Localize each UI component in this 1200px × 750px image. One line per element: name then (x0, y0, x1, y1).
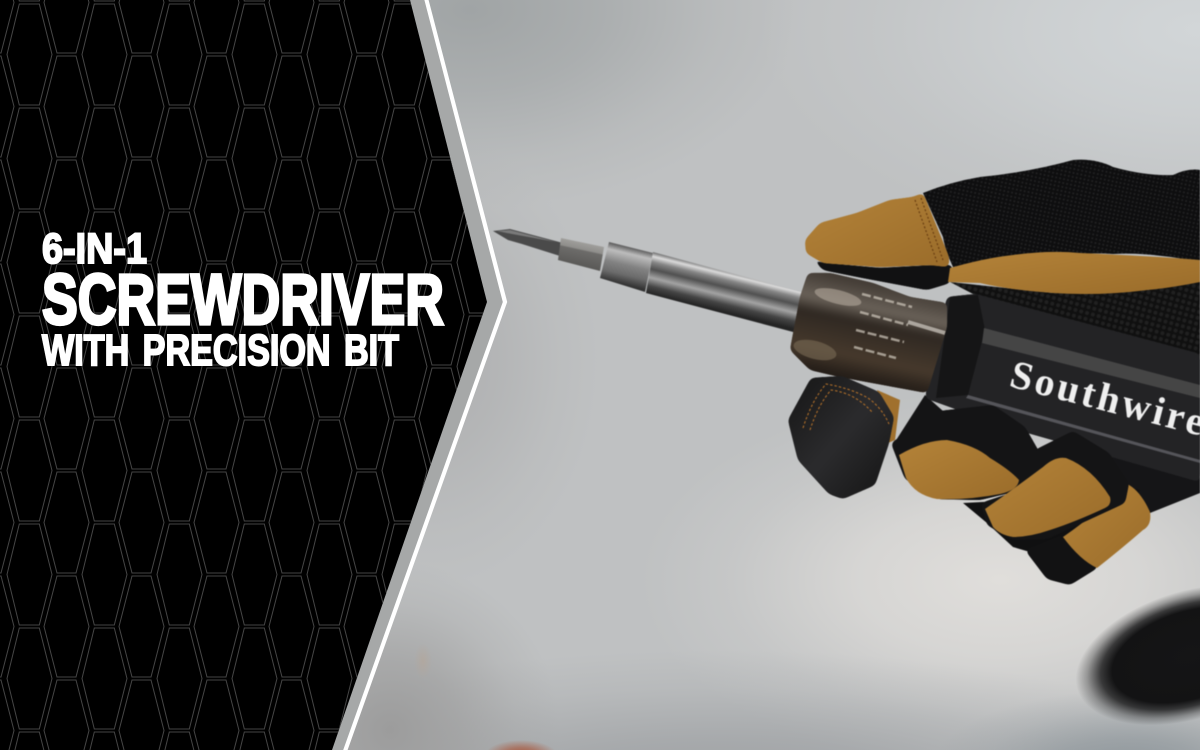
glove index fingertip (805, 193, 949, 267)
handle lower groove (966, 395, 1200, 463)
screwdriver metal collar (600, 242, 653, 292)
glove ring finger (981, 431, 1129, 540)
black sliver above fingertip (857, 203, 898, 217)
glove dark backing between fingers (963, 470, 1140, 560)
chuck knurling (854, 294, 912, 358)
blurred dark object bottom right (1060, 580, 1200, 730)
title line: SCREWDRIVER: SCREWDRIVER (42, 261, 444, 340)
black shadow under index finger (808, 255, 953, 290)
glove tan palm band (948, 252, 1200, 294)
grey band between black panel and white chevron (332, 0, 505, 750)
screwdriver metal shaft (646, 252, 805, 333)
screwdriver and gloved hand photo (493, 160, 1200, 585)
glove thumb (788, 376, 900, 499)
screwdriver ratchet chuck (790, 273, 947, 393)
handle grip strip (982, 328, 1200, 398)
blurred red object bottom edge (480, 735, 562, 750)
left black panel (0, 0, 490, 750)
screwdriver handle (925, 294, 1200, 482)
blurred tan smudge (412, 642, 434, 680)
title line: 6-IN-1: 6-IN-1 (42, 225, 147, 273)
screwdriver precision bit (493, 229, 604, 271)
glove little finger (1025, 484, 1150, 585)
glove middle finger (891, 405, 1042, 500)
white chevron line (343, 0, 507, 750)
title (42, 225, 444, 375)
glove palm and wrist behind handle (893, 280, 1200, 513)
glove back of hand (923, 160, 1200, 267)
title line: WITH PRECISION BIT: WITH PRECISION BIT (42, 326, 399, 375)
